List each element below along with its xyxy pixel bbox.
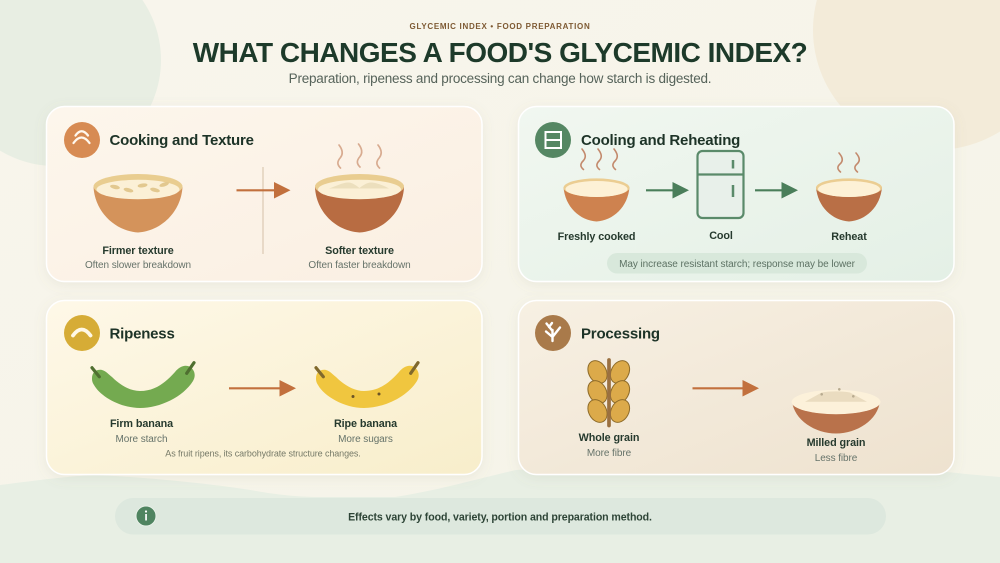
arrow: whole to milled <box>692 380 759 396</box>
icon: grain <box>535 315 571 351</box>
icon: fridge <box>535 122 571 158</box>
panel: cooling and reheating <box>518 106 954 282</box>
label: softer texture: Softer texture <box>325 245 394 257</box>
footer note: Effects vary by food, variety, portion and preparation method. <box>348 512 652 524</box>
soft bowl <box>315 174 404 232</box>
panel: ripeness <box>46 300 482 474</box>
icon: cooking <box>64 122 100 158</box>
heading: ripeness: Ripeness <box>110 326 175 342</box>
whole grain stalk <box>584 357 633 426</box>
label: milled grain: Milled grain <box>807 437 865 449</box>
label: reheat: Reheat <box>831 231 867 243</box>
label: firmer texture: Firmer texture <box>102 245 174 257</box>
label: cool: Cool <box>709 230 733 242</box>
firm bowl <box>94 174 182 232</box>
icon: info <box>136 506 156 526</box>
arrow: to cool <box>646 182 689 198</box>
label: ripe banana: Ripe banana <box>334 418 398 430</box>
arrow: firm to ripe <box>229 380 296 396</box>
caption: less fibre: Less fibre <box>815 453 858 464</box>
heading: cooling and reheating: Cooling and Reheating <box>581 132 740 149</box>
caption: more sugars: More sugars <box>338 434 393 445</box>
heading: cooking and texture: Cooking and Texture <box>110 132 254 149</box>
ripe banana <box>316 363 419 408</box>
fridge <box>698 151 744 218</box>
label: firm banana: Firm banana <box>110 418 174 430</box>
steam <box>338 144 381 168</box>
steam: fresh <box>581 149 617 170</box>
label: whole grain: Whole grain <box>579 432 639 444</box>
title: WHAT CHANGES A FOOD'S GLYCEMIC INDEX? <box>193 37 807 68</box>
caption: more fibre: More fibre <box>587 448 632 459</box>
heading: processing: Processing <box>581 326 660 342</box>
reheat bowl <box>816 178 882 222</box>
note: ripening: As fruit ripens, its carbohydrate structure changes. <box>165 448 361 458</box>
subtitle: Preparation, ripeness and processing can change how starch is digested. <box>289 71 711 86</box>
arrow: to reheat <box>755 182 798 198</box>
milled bowl <box>792 388 880 434</box>
label: freshly cooked: Freshly cooked <box>558 231 635 243</box>
caption: faster breakdown: Often faster breakdown <box>308 260 411 271</box>
panel: cooking and texture <box>46 106 482 282</box>
note pill: May increase resistant starch; response may be lower <box>619 259 856 270</box>
panel: processing <box>518 300 954 474</box>
icon: ripeness <box>64 315 100 351</box>
footer banner <box>115 498 886 534</box>
note pill <box>607 253 867 274</box>
fresh bowl <box>564 178 630 222</box>
arrow: firm to soft <box>236 182 290 198</box>
caption: more starch: More starch <box>116 434 167 445</box>
eyebrow: GLYCEMIC INDEX • FOOD PREPARATION <box>410 22 590 31</box>
steam: reheat <box>838 153 859 172</box>
green banana <box>92 363 195 408</box>
caption: slower breakdown: Often slower breakdown <box>85 260 191 271</box>
divider line <box>262 167 264 254</box>
